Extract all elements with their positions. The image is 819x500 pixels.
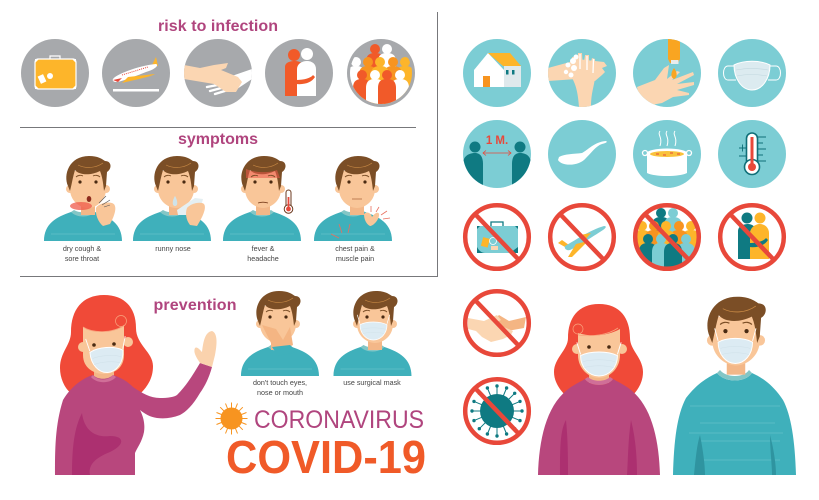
figure: surgical mask <box>334 291 412 376</box>
figure: covering face <box>241 291 319 376</box>
icon: crowd <box>347 39 415 107</box>
figure: man in mask <box>673 297 796 475</box>
symptom labels: runny nose <box>155 244 191 253</box>
symptom labels: chest pain & <box>335 244 375 253</box>
icon: no travel <box>465 205 529 269</box>
icon: no hugging <box>720 205 784 269</box>
figure: chest pain <box>314 156 392 241</box>
prevention labels: nose or mouth <box>257 388 303 397</box>
icon: no flights <box>550 205 614 269</box>
icon: thermometer small <box>284 190 293 213</box>
icon: no virus <box>465 379 529 443</box>
prevention labels: don't touch eyes, <box>253 378 307 387</box>
heading: prevention: prevention <box>154 297 236 314</box>
icon: hand sanitizer <box>633 39 701 107</box>
icon: soup pot <box>633 120 701 188</box>
icon: hug <box>265 39 333 107</box>
figure: dry cough <box>44 156 122 241</box>
icon: house <box>463 39 531 107</box>
icon: suitcase <box>21 39 89 107</box>
figure: fever <box>223 156 301 241</box>
icon: 1 metre distance: 1 M. <box>486 135 508 147</box>
title: coronavirus: CORONAVIRUS <box>254 406 424 434</box>
symptom labels: sore throat <box>65 254 99 263</box>
icon: spoon <box>548 120 616 188</box>
symptom labels: fever & <box>252 244 275 253</box>
icon: no crowds <box>632 203 702 271</box>
prevention labels <box>253 378 401 397</box>
heading: risk to infection: risk to infection <box>158 18 278 35</box>
icon: 1 metre distance <box>463 120 531 188</box>
symptom labels: headache <box>247 254 279 263</box>
icon: sun virus <box>216 402 248 434</box>
icon: airplane <box>102 39 170 107</box>
figure: woman waving <box>55 295 217 475</box>
icon: handshake <box>184 39 252 107</box>
prevention labels: use surgical mask <box>343 378 401 387</box>
heading: symptoms: symptoms <box>178 131 258 148</box>
icon: no handshakes <box>465 291 529 355</box>
symptom labels: muscle pain <box>336 254 374 263</box>
panel frame lines <box>20 12 438 276</box>
figure: woman in mask <box>538 304 660 475</box>
symptom labels: dry cough & <box>63 244 101 253</box>
icon: thermometer <box>718 120 786 188</box>
symptom labels <box>63 244 375 263</box>
icon: face mask <box>718 39 786 107</box>
title: covid-19: COVID-19 <box>226 431 426 483</box>
icon: hand washing <box>548 39 616 107</box>
figure: runny nose <box>133 156 211 241</box>
